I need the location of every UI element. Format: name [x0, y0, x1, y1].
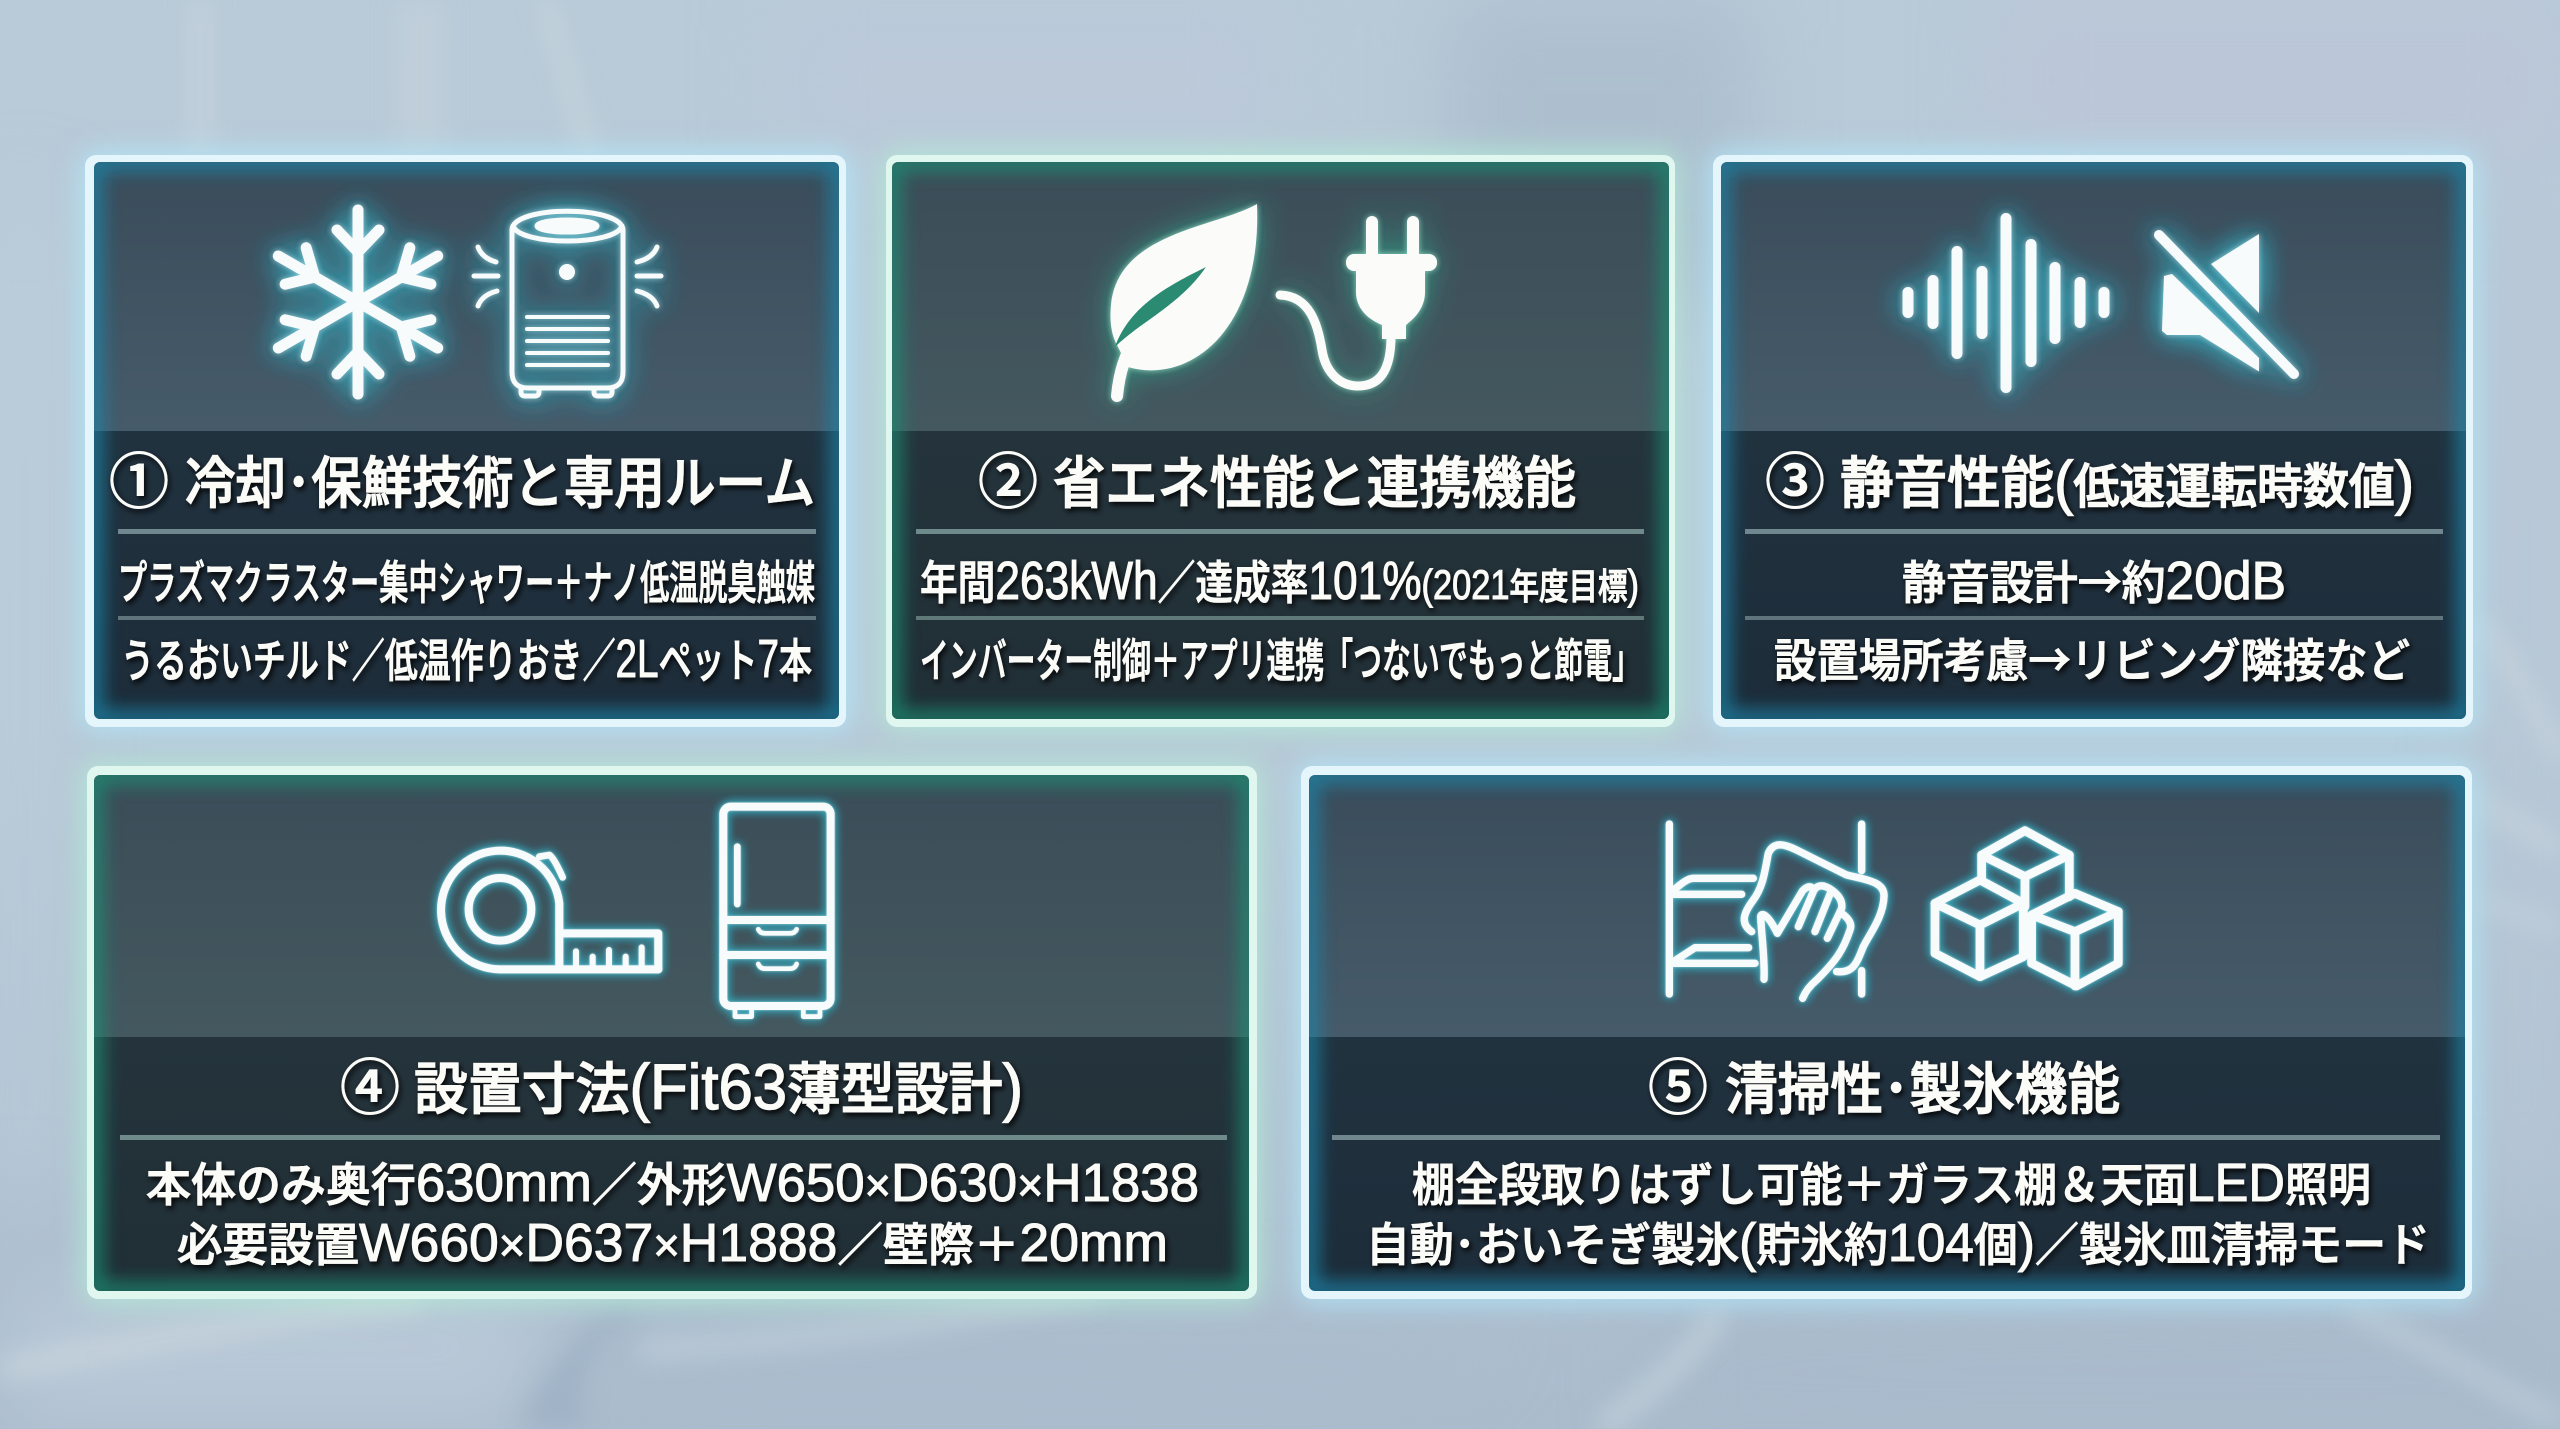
- title: panel 5: 清掃性･製氷機能: [1725, 1058, 2120, 1121]
- panel: cooling and freshness: [81, 151, 852, 731]
- text: panel 1 line 1: プラズマクラスター集中シャワー＋ナノ低温脱臭触媒: [118, 557, 815, 609]
- icon: snowflake: [268, 210, 448, 394]
- panel: cleaning and ice making: [1297, 762, 2476, 1303]
- icon: leaf: [1110, 204, 1257, 396]
- text: panel 5 line 1: 棚全段取りはずし可能＋ガラス棚＆天面LED照明: [1412, 1153, 2371, 1213]
- text: panel 2 line 2: インバーター制御＋アプリ連携「つないでもっと節電」: [920, 635, 1641, 687]
- text: panel 3 line 1: 静音設計→約20dB: [1902, 547, 2286, 613]
- text: panel 4 line 1: 本体のみ奥行630mm／外形W650×D630×H1838: [146, 1153, 1199, 1213]
- icon: sound wave: [1902, 213, 2110, 393]
- panel: energy saving: [882, 151, 1679, 731]
- text: panel 2 line 1: 年間263kWh／達成率101%(2021年度目標): [920, 551, 1639, 611]
- title: panel 1: ①: [109, 449, 169, 516]
- title: panel 2: 省エネ性能と連携機能: [1053, 452, 1576, 515]
- icon: shelf and wiping hand: [1669, 824, 1884, 998]
- text: panel 5 line 2: 自動･おいそぎ製氷(貯氷約104個)／製氷皿清掃モード: [1366, 1213, 2430, 1273]
- icon: muted speaker: [2159, 234, 2294, 374]
- panel: installation dimensions: [83, 762, 1261, 1303]
- title: panel 3: 静音性能(低速運転時数値): [1840, 449, 2414, 516]
- title: panel 1: 冷却･保鮮技術と専用ルーム: [185, 452, 815, 515]
- text: panel 3 line 2: 設置場所考慮→リビング隣接など: [1774, 625, 2410, 691]
- title: panel 3: ③: [1765, 449, 1825, 516]
- icon: air purifier: [474, 211, 661, 396]
- icon: ice cubes: [1935, 831, 2118, 986]
- text: panel 1 line 2: うるおいチルド／低温作りおき／2Lペット7本: [121, 629, 812, 689]
- icon: plug: [1280, 216, 1437, 386]
- title: panel 5: ⑤: [1648, 1055, 1708, 1122]
- icon: refrigerator: [723, 807, 831, 1017]
- title: panel 4: 設置寸法(Fit63薄型設計): [414, 1051, 1023, 1123]
- panel: quiet performance: [1709, 151, 2477, 731]
- title: panel 2: ②: [978, 449, 1038, 516]
- title: panel 4: ④: [340, 1055, 400, 1122]
- text: panel 4 line 2: 必要設置W660×D637×H1888／壁際＋20mm: [177, 1213, 1168, 1273]
- icon: tape measure: [441, 851, 658, 969]
